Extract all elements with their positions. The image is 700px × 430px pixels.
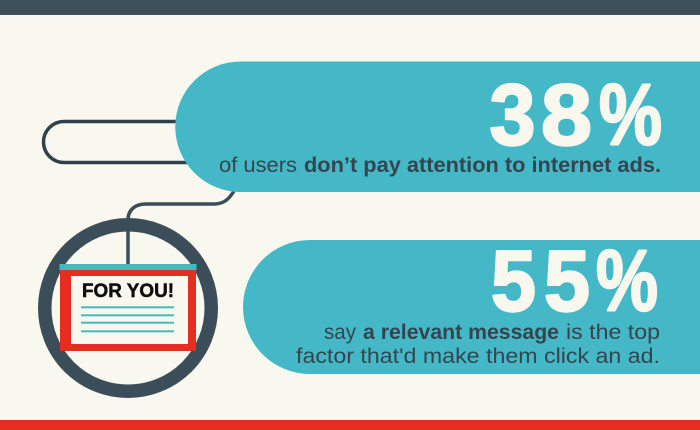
top bar (0, 0, 700, 15)
ring (45, 225, 211, 391)
mouse cable to ring (128, 191, 234, 265)
stat number: % (599, 68, 662, 164)
stat caption: is the top (566, 320, 660, 344)
sign inner panel (71, 276, 188, 344)
pill background (243, 240, 700, 374)
bottom bar (0, 420, 700, 430)
stat number: % (596, 234, 658, 330)
panel: 38% stat (175, 62, 700, 192)
pill background (175, 62, 700, 192)
stat caption: say (324, 320, 356, 344)
stat caption: factor that'd make them click an ad. (296, 344, 660, 368)
stat caption: don’t pay attention to internet ads. (304, 153, 661, 177)
stat caption: a relevant message (363, 320, 559, 344)
stat number (491, 234, 658, 330)
stat number: 5 (491, 234, 536, 330)
sign top bar (60, 264, 196, 270)
stat number (490, 68, 662, 164)
stat number: 3 (490, 68, 536, 164)
mouse cable loop (43, 122, 200, 162)
sign text lines (81, 306, 174, 332)
icon: ring with targeted ad sign (45, 225, 211, 391)
stat number: 5 (544, 234, 590, 330)
sign frame (60, 270, 196, 351)
stat caption: of users (219, 153, 297, 177)
stat caption (296, 320, 660, 368)
sign heading: FOR YOU! (82, 280, 174, 302)
panel: 55% stat (243, 234, 700, 374)
stat number: 8 (541, 68, 592, 164)
